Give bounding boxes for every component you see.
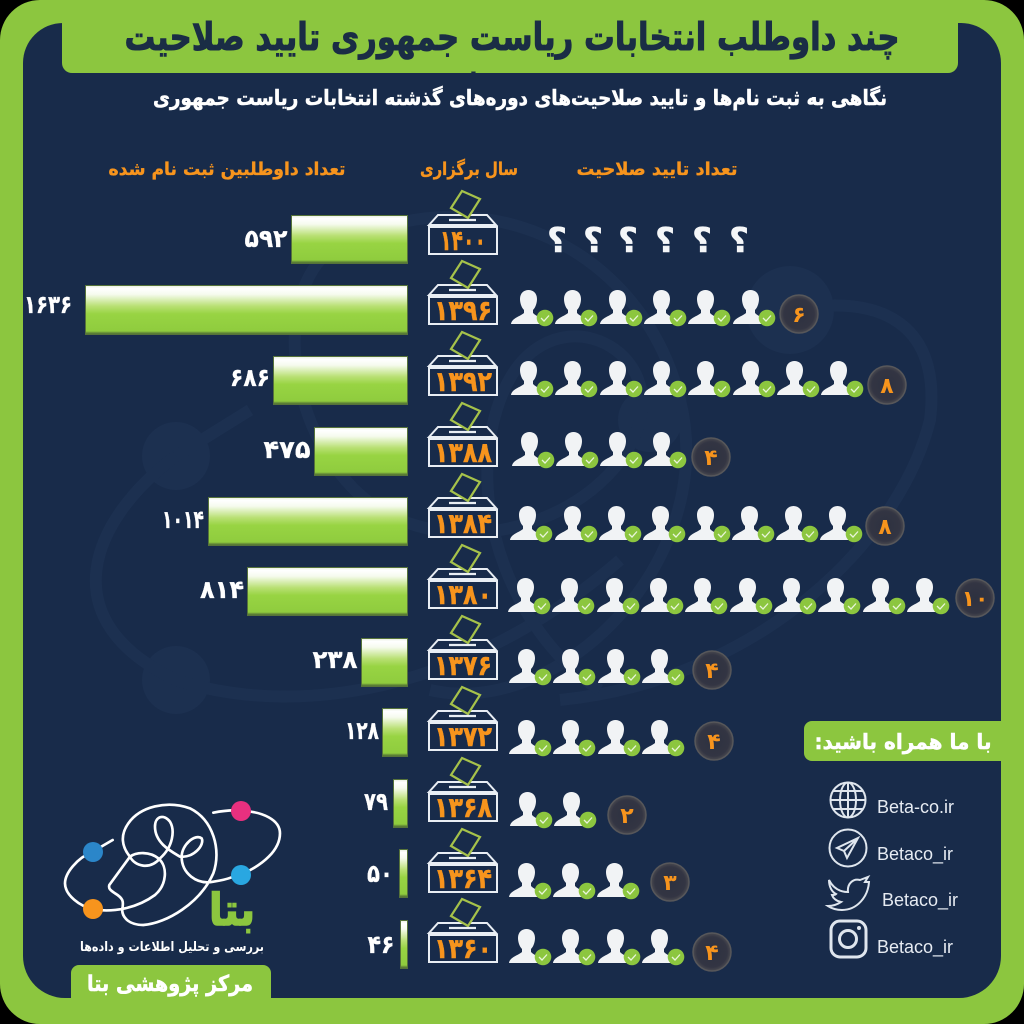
icon: telegram (830, 830, 866, 866)
icon: twitter (828, 877, 869, 910)
ballot box 1372: ۱۳۷۲ (434, 720, 492, 753)
row 1376 (312, 616, 731, 689)
approved people 1392 (511, 361, 863, 397)
research center tab: مرکز پژوهشی بتا (87, 972, 253, 997)
approved people 1388 (512, 432, 686, 468)
bar 1392 (230, 356, 408, 404)
row 1380 (200, 545, 994, 617)
count badge 1364: ۳ (663, 871, 677, 896)
count badge 1380 (956, 579, 994, 617)
count badge 1368 (608, 796, 646, 834)
text: twitter handle: Betaco_ir (882, 890, 958, 911)
ballot box 1396 (429, 261, 497, 327)
question marks: ؟ (655, 221, 675, 261)
ballot box 1368: ۱۳۶۸ (434, 791, 492, 824)
ballot box 1396: ۱۳۹۶ (434, 294, 492, 327)
question marks: ؟ (729, 221, 749, 261)
bar 1400 (244, 216, 408, 264)
count badge 1372: ۴ (707, 730, 721, 755)
logo node: pink (231, 801, 251, 821)
icon: globe (830, 782, 866, 818)
approved people 1368 (510, 792, 596, 828)
count badge 1384 (866, 507, 904, 545)
bar 1384 (162, 498, 408, 546)
ballot box 1376: ۱۳۷۶ (434, 649, 492, 682)
ballot box 1384: ۱۳۸۴ (434, 507, 492, 540)
ballot box 1392 (429, 332, 497, 398)
column heading: year: سال برگزاری (420, 158, 518, 180)
row 1372 (345, 687, 733, 760)
bar 1380 (200, 568, 408, 616)
row 1360 (368, 899, 731, 971)
ballot box 1388: ۱۳۸۸ (434, 436, 492, 469)
count badge 1396 (780, 295, 818, 333)
bar 1372: ۱۲۸ (345, 716, 379, 745)
text: website: Beta-co.ir (877, 797, 954, 817)
bar 1384: ۱۰۱۴ (162, 505, 204, 534)
ballot box 1360 (429, 899, 497, 965)
bar 1364: ۵۰ (367, 859, 393, 888)
logo node: sky (231, 865, 251, 885)
logo tagline: بررسی و تحلیل اطلاعات و داده‌ها (80, 940, 264, 955)
approved people 1376 (509, 649, 684, 685)
column heading: registered: تعداد داوطلبین ثبت نام شده (108, 159, 346, 180)
row 1384 (162, 474, 904, 546)
row 1396 (24, 261, 818, 334)
bar 1376 (312, 638, 408, 686)
bar 1372 (345, 708, 408, 756)
ballot box 1388 (429, 403, 497, 469)
background watermark logo (96, 217, 931, 714)
subtitle: نگاهی به ثبت نام‌ها و تایید صلاحیت‌های دوره‌های گذشته انتخابات ریاست جمهوری (153, 85, 887, 110)
follow-us tab (804, 721, 1001, 761)
ballot box 1368 (429, 758, 497, 824)
text: telegram handle: Betaco_ir (877, 844, 953, 865)
ballot box 1380: ۱۳۸۰ (434, 578, 492, 611)
bar 1400: ۵۹۲ (244, 224, 288, 253)
count badge 1360 (693, 933, 731, 971)
count badge 1388: ۴ (704, 446, 718, 471)
count badge 1360: ۴ (705, 941, 719, 966)
bar 1368 (364, 780, 408, 828)
title: شده‌اند (446, 67, 530, 107)
row 1388 (264, 403, 730, 476)
logo line drawing (65, 805, 280, 925)
approved people 1396 (511, 290, 775, 326)
ballot box 1360: ۱۳۶۰ (434, 932, 492, 965)
approved people 1372 (509, 720, 684, 756)
bar 1388 (264, 428, 408, 476)
icon: instagram (831, 921, 866, 957)
bar 1396 (24, 286, 408, 334)
ballot box 1364: ۱۳۶۴ (434, 862, 492, 895)
approved people 1364 (509, 863, 639, 899)
bar 1368: ۷۹ (364, 787, 388, 816)
logo (65, 801, 280, 955)
ballot box 1400 (429, 191, 497, 257)
ballot box 1384 (429, 474, 497, 540)
approved people 1384 (510, 506, 862, 542)
count badge 1396: ۶ (792, 303, 806, 328)
header tab (62, 20, 958, 73)
count badge 1388 (692, 438, 730, 476)
count badge 1384: ۸ (878, 515, 892, 540)
count badge 1380: ۱۰ (962, 587, 988, 612)
row 1400 (244, 191, 749, 264)
text: instagram handle: Betaco_ir (877, 937, 953, 958)
logo node: blue (83, 842, 103, 862)
approved people 1360 (509, 929, 684, 965)
research center tab (71, 965, 271, 1000)
ballot box 1364 (429, 829, 497, 895)
ballot box 1400: ۱۴۰۰ (440, 224, 486, 257)
question marks: ؟ (692, 221, 712, 261)
bar 1360: ۴۶ (368, 930, 394, 959)
bar 1360 (368, 920, 408, 968)
logo wordmark: بتا (209, 885, 255, 936)
follow-us tab: با ما همراه باشید: (814, 730, 992, 754)
count badge 1368: ۲ (620, 804, 634, 829)
ballot box 1376 (429, 616, 497, 682)
count badge 1376: ۴ (705, 659, 719, 684)
count badge 1372 (695, 722, 733, 760)
question marks (547, 221, 749, 261)
ballot box 1372 (429, 687, 497, 753)
row 1364 (367, 829, 689, 901)
row 1392 (230, 332, 906, 404)
bar 1380: ۸۱۴ (200, 575, 244, 604)
title (126, 20, 898, 73)
logo node: orange (83, 899, 103, 919)
bar 1388: ۴۷۵ (264, 435, 310, 464)
bar 1396: ۱۶۳۶ (24, 290, 72, 319)
question marks: ؟ (618, 221, 638, 261)
approved people 1380 (508, 578, 949, 614)
count badge 1392 (868, 366, 906, 404)
column heading: approved: تعداد تایید صلاحیت (576, 159, 738, 180)
bar 1376: ۲۳۸ (312, 645, 358, 674)
question marks: ؟ (583, 221, 603, 261)
row 1368 (364, 758, 646, 834)
question marks: ؟ (547, 221, 567, 261)
count badge 1364 (651, 863, 689, 901)
count badge 1392: ۸ (880, 374, 894, 399)
ballot box 1392: ۱۳۹۲ (434, 365, 492, 398)
bar 1364 (367, 850, 408, 898)
count badge 1376 (693, 651, 731, 689)
bar 1392: ۶۸۶ (230, 363, 270, 392)
ballot box 1380 (429, 545, 497, 611)
